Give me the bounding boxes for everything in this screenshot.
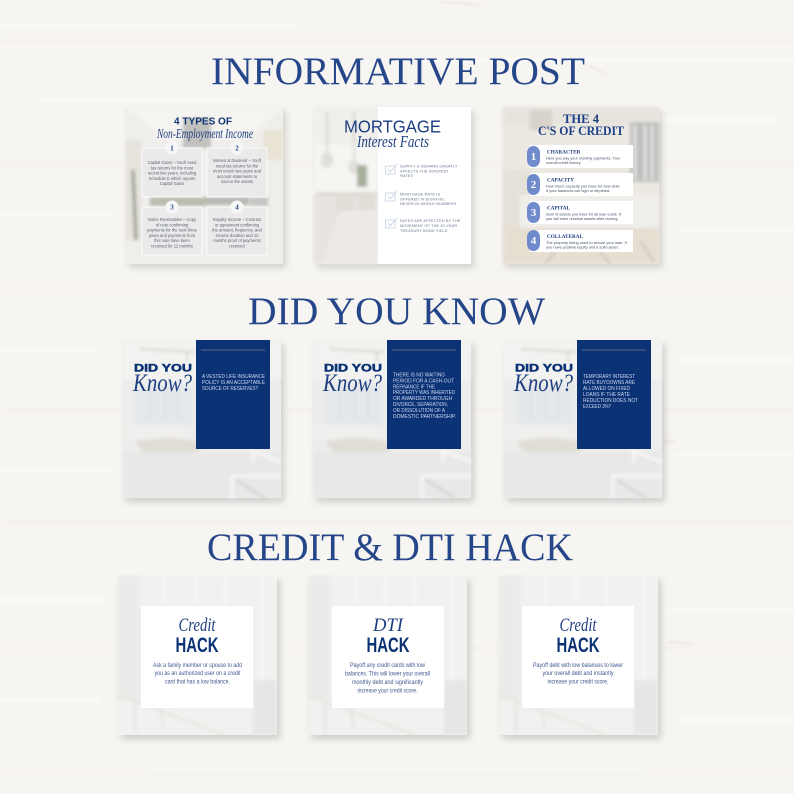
row: capacity: If your balances are high or depleted.: [546, 188, 610, 193]
text panel 4: royalty income: received: [229, 244, 245, 248]
navy text box: OR AWARDED THROUGH: [393, 396, 452, 402]
white text card: balances. This will lower your overall: [345, 670, 430, 678]
checklist item: rates affected: TREASURY BOND YIELD: [400, 228, 448, 233]
white text card: [522, 606, 634, 708]
navy text box: [577, 340, 651, 449]
checklist item: supply and demand: [386, 164, 458, 178]
white text card: your overall debt and instantly: [542, 670, 614, 677]
text panel 2: interest and dividend: need tax returns for the: [216, 163, 259, 168]
row: capital: 3: [531, 207, 537, 219]
text panel 2: interest and dividend: source the assets: [221, 179, 253, 184]
text panel 4: royalty income: Royalty Income – Contract: [213, 217, 262, 222]
panel: credit hack 1: [118, 576, 280, 739]
panel: 4 types of non-employment income: [126, 107, 286, 268]
text panel 3: notes receivables: of note confirming: [156, 222, 189, 227]
panel: did you know 1: [123, 340, 284, 502]
row: capacity: [527, 173, 633, 196]
navy text box: [387, 340, 461, 449]
white text card: Credit: [178, 615, 216, 636]
text panel 1: capital gains: recent two years, including: [148, 171, 197, 176]
checklist item: rates affected: [386, 218, 461, 233]
card title: 4 TYPES OF: [174, 116, 233, 128]
row: capacity: 2: [531, 179, 537, 191]
white text card: Ask a family member or spouse to add: [153, 662, 242, 669]
navy text box: ALLOWED ON FIXED: [583, 386, 630, 392]
card title: MORTGAGE: [344, 116, 441, 136]
navy text box: POLICY IS AN ACCEPTABLE: [202, 380, 265, 386]
text panel 1: capital gains: tax returns for the most: [151, 165, 194, 170]
card script subtitle: Know?: [132, 370, 192, 397]
card script subtitle: Know?: [513, 370, 573, 397]
text panel 3: notes receivables: received for 12 months: [151, 244, 193, 248]
navy text box: TEMPORARY INTEREST: [583, 374, 636, 380]
row: collateral: [527, 230, 633, 252]
white text card: Payoff any credit cards with low: [350, 662, 425, 669]
navy text box: THERE IS NO WAITING: [393, 372, 445, 378]
white text card: Credit: [560, 615, 597, 636]
row: character: CHARACTER: [547, 150, 581, 156]
row: collateral: COLLATERAL: [547, 234, 583, 240]
text panel 3: notes receivables: Notes Receivables – Copy: [148, 217, 197, 222]
checklist item: mortgage rate: NEVER IN WHOLE NUMBERS: [400, 201, 457, 206]
number badges: [166, 142, 244, 214]
row: collateral: 4: [531, 235, 537, 247]
panel: did you know 3: [504, 340, 665, 502]
number badges: 2: [235, 144, 239, 152]
checklist item: rates affected: RATES ARE AFFECTED BY THE: [400, 218, 461, 223]
white text card: card that has a low balance.: [165, 678, 230, 686]
text panel 3: notes receivables: this note have been: [154, 238, 191, 243]
text panel 2: interest and dividend: [207, 148, 267, 197]
card title: DID YOU: [324, 362, 382, 374]
checklist item: supply and demand: SUPPLY & DEMAND GREATLY: [400, 164, 458, 168]
text panel 1: capital gains: Capital Gains: [160, 181, 184, 186]
white text card: DTI: [372, 615, 405, 636]
row: capital: [527, 201, 633, 224]
white text card: increase your credit score.: [548, 678, 609, 686]
text panel 4: royalty income: [207, 207, 267, 255]
row: collateral: The property being used to secure your loan. If: [546, 240, 628, 245]
row: character: Here you pay your monthly payments. Your: [546, 156, 621, 160]
card script subtitle: Interest Facts: [356, 132, 429, 151]
checklist item: mortgage rate: OFFERED IN EIGHTHS,: [400, 196, 445, 201]
navy text box: REFINANCE IF THE: [393, 384, 435, 390]
panel: did you know 2: [313, 340, 474, 502]
card title: DID YOU: [515, 362, 573, 374]
text panel 4: royalty income: or agreement confirming: [215, 222, 260, 227]
checklist item: mortgage rate: [386, 191, 457, 206]
navy text box: DIVORCE, SEPARATION,: [393, 402, 448, 408]
text panel 2: interest and dividend: most recent two years and: [213, 169, 262, 174]
card script subtitle: Non-Employment Income: [156, 127, 253, 142]
text panel 4: royalty income: months proof of payments: [213, 238, 261, 243]
text panel 3: notes receivables: payments for the next three: [147, 228, 198, 233]
white text card: HACK: [556, 634, 600, 657]
panel: dti hack: [308, 576, 470, 739]
checklist item: supply and demand: AFFECTS THE INTEREST: [400, 168, 449, 173]
navy text box: PERIOD FOR A CASH-OUT: [393, 378, 455, 384]
number badges: 4: [235, 204, 239, 212]
navy text box: A VESTED LIFE INSURANCE: [202, 374, 265, 380]
row: capacity: How much capacity you have for new debt.: [546, 184, 620, 188]
navy text box: RATE BUYDOWNS ARE: [583, 380, 635, 386]
white text card: Payoff debt with low balances to lower: [533, 662, 624, 669]
heading: informative post: INFORMATIVE POST: [211, 50, 585, 93]
white text card: you as an authorized user on a credit: [154, 670, 241, 677]
card subtitle: C'S OF CREDIT: [538, 124, 625, 138]
white text card: HACK: [366, 634, 410, 657]
text panel 1: capital gains: [142, 148, 202, 197]
navy text box: EXCEED 3%?: [583, 404, 611, 410]
row: capital: CAPITAL: [547, 206, 571, 212]
text panel 3: notes receivables: years and payments from: [149, 233, 196, 238]
heading: did you know: DID YOU KNOW: [248, 290, 545, 333]
row: character: 1: [531, 151, 536, 163]
text panel 4: royalty income: income duration and 12: [216, 233, 259, 238]
navy text box: DOMESTIC PARTNERSHIP.: [393, 414, 456, 420]
card title: DID YOU: [134, 362, 192, 374]
navy text box: [196, 340, 270, 449]
panel: the 4 Cs of credit: [503, 107, 662, 268]
panel: mortgage interest facts: [314, 107, 474, 268]
card script subtitle: Know?: [322, 370, 382, 397]
navy text box: LOANS IF THE RATE: [583, 392, 630, 398]
checklist item: mortgage rate: MORTGAGE RATE IS: [400, 192, 440, 196]
navy text box: SOURCE OF RESERVES?: [202, 386, 258, 392]
white text card: increase your credit score.: [358, 688, 418, 694]
text panel 2: interest and dividend: account statements to: [217, 174, 258, 179]
row: capacity: CAPACITY: [547, 178, 574, 184]
white text card: monthly debt and significantly: [352, 679, 424, 686]
number badges: 3: [170, 204, 174, 212]
text panel 1: capital gains: Capital Gains – You'll need: [148, 160, 197, 165]
heading: credit and dti hack: CREDIT & DTI HACK: [207, 526, 573, 569]
text panel 3: notes receivables: [142, 207, 202, 255]
text panel 4: royalty income: the amount, frequency, and: [212, 228, 262, 233]
panel: credit hack 2: [499, 576, 661, 739]
white text card: HACK: [176, 634, 218, 657]
text panel 2: interest and dividend: Interest & Dividend – You'll: [213, 158, 261, 163]
checklist item: supply and demand: RATES: [400, 173, 413, 178]
row: collateral: you have positive equity and a solid asset.: [546, 244, 619, 249]
row: character: overall credit history.: [546, 160, 581, 165]
checklist item: rates affected: MOVEMENT OF THE 10-YEAR: [400, 223, 457, 228]
white text card: [141, 606, 253, 708]
white text card: [332, 606, 444, 708]
row: capital: you will have residual assets after closing.: [546, 216, 618, 221]
navy text box: PROPERTY WAS INHERITED: [393, 390, 455, 396]
row: capital: Sum of assets you have for all loan costs. If: [546, 212, 622, 216]
navy text box: REDUCTION DOES NOT: [583, 398, 639, 404]
text panel 1: capital gains: Schedule D which reports: [149, 176, 195, 181]
number badges: 1: [170, 144, 174, 152]
navy text box: OR DISSOLUTION OF A: [393, 408, 445, 414]
row: character: [527, 145, 633, 168]
card title: THE 4: [563, 112, 600, 126]
